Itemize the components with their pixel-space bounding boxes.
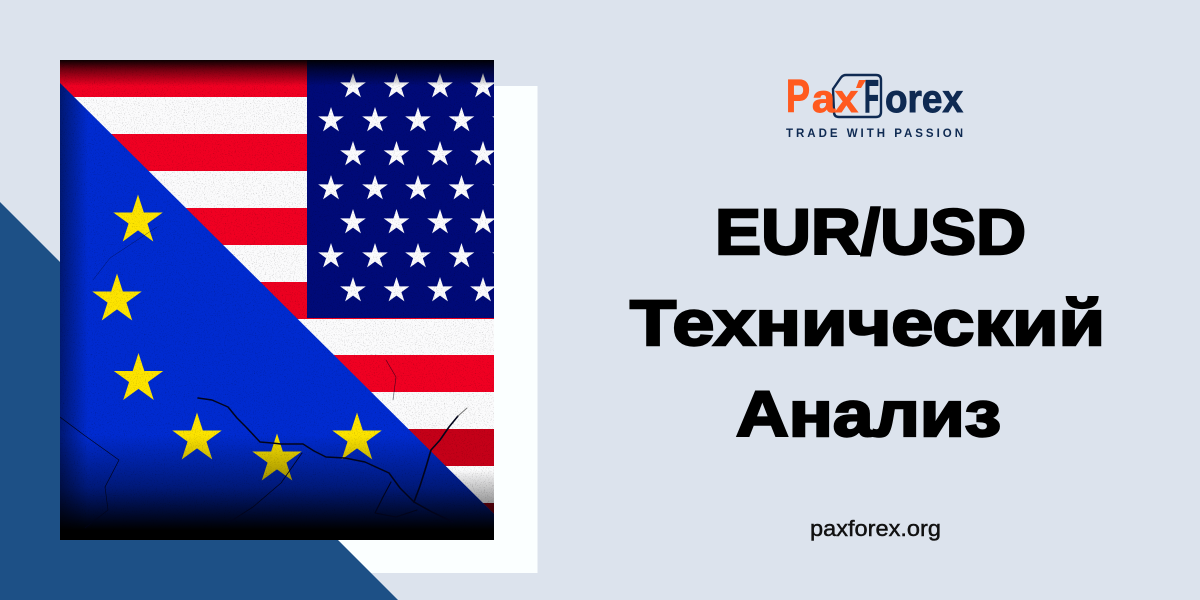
EU shading xyxy=(60,83,494,540)
surface grain xyxy=(60,60,494,540)
logo wordmark: F xyxy=(864,70,879,122)
title line 2: Технический xyxy=(630,287,1105,359)
logo wordmark: orex xyxy=(885,78,963,121)
website url: paxforex.org xyxy=(810,516,941,541)
US canton with stars xyxy=(307,60,494,318)
US flag stripes xyxy=(60,60,494,540)
flag image: EU and US split diagonally xyxy=(60,60,518,540)
EU yellow stars xyxy=(92,194,382,481)
logo: PaxForex xyxy=(786,70,963,140)
title line 3: Анализ xyxy=(736,378,1001,450)
logo tagline: TRADE WITH PASSION xyxy=(786,128,963,140)
cracks xyxy=(60,227,467,528)
title xyxy=(630,196,1105,450)
dark blue corner triangle xyxy=(0,202,398,600)
logo frame xyxy=(833,75,881,117)
logo orange accent xyxy=(856,80,866,88)
EU flag triangle xyxy=(60,83,494,540)
logo wordmark: P xyxy=(786,70,810,122)
white backing panel xyxy=(300,86,538,573)
title line 1: EUR/USD xyxy=(715,196,1026,268)
logo wordmark: ax xyxy=(812,78,858,121)
